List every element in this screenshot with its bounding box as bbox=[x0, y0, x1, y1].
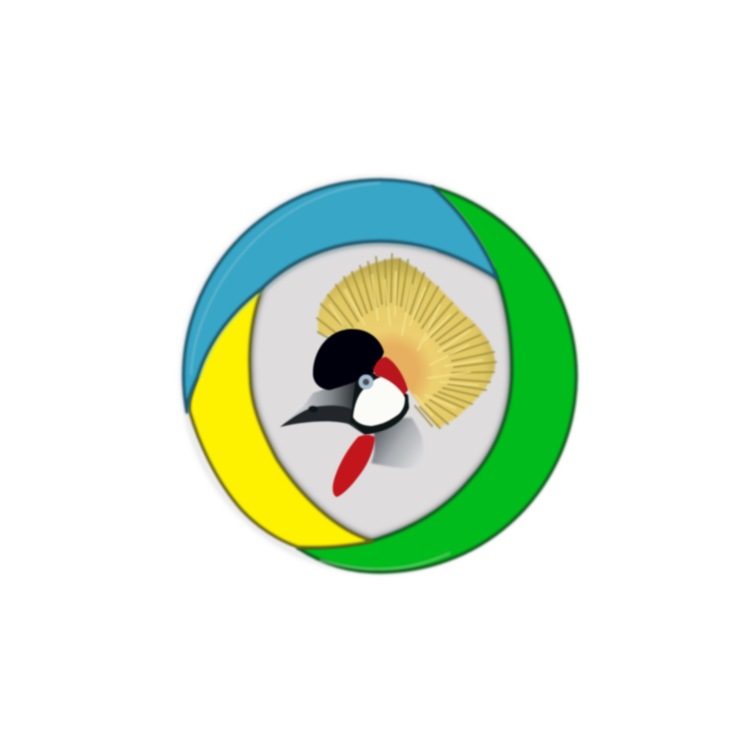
crane beak and face bbox=[280, 372, 409, 435]
crane red crown patch bbox=[373, 357, 408, 396]
yellow crescent bbox=[190, 288, 372, 547]
soft halo around ring bbox=[183, 179, 575, 571]
blue crescent bbox=[184, 180, 497, 412]
crane red throat wattle bbox=[333, 435, 375, 497]
crane crest bbox=[317, 254, 496, 428]
crane neck bbox=[371, 418, 424, 468]
green crescent bbox=[298, 187, 576, 572]
crane eye bbox=[358, 374, 374, 390]
crane black cap bbox=[313, 329, 384, 390]
crane white cheek bbox=[353, 377, 405, 426]
inner grey panel bbox=[250, 241, 512, 541]
